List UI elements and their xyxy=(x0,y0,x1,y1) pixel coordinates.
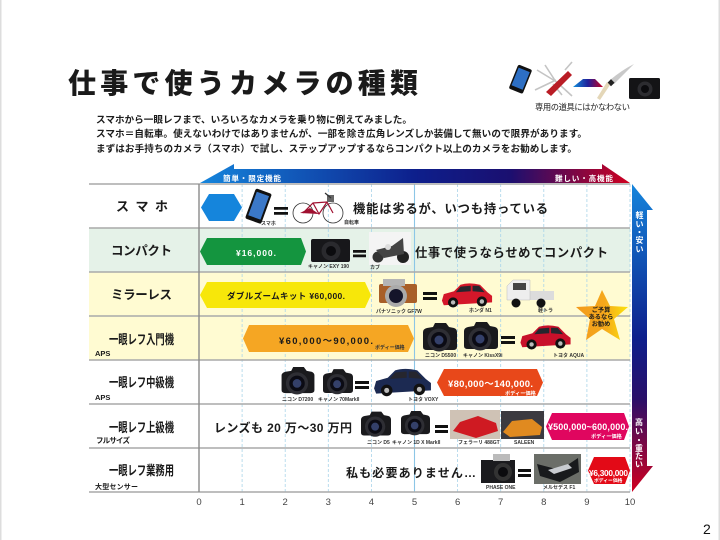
row: mirrorless xyxy=(111,279,554,315)
star callout: recommended: あるなら xyxy=(589,313,613,321)
row: high-end DSLR: ¥500,000~600,000. xyxy=(548,422,628,432)
row: high-end DSLR: SALEEN xyxy=(514,440,535,446)
equals xyxy=(423,292,437,300)
row: mid DSLR: ボディー価格 xyxy=(505,389,537,397)
row: entry DSLR: ボディー価格 xyxy=(375,344,405,351)
price tag: green xyxy=(200,238,306,265)
row: mid DSLR: キャノン 70MarkII xyxy=(318,397,360,403)
top arrow: difficulty and functions: 簡単・限定機能 xyxy=(223,173,281,183)
comment: 仕事で使うならせめてコンパクト xyxy=(415,245,608,260)
row: mid DSLR: ニコン D7200 xyxy=(282,397,313,403)
row: entry DSLR: キャノン KissX9i xyxy=(463,353,503,359)
row: mid DSLR: ¥80,000～140,000. xyxy=(448,379,533,390)
icon: kei truck xyxy=(507,280,554,308)
row: professional DSLR: ボディー価格 xyxy=(594,477,623,484)
icon: bicycle xyxy=(293,193,343,223)
icon: red sports car photo xyxy=(450,410,500,439)
right arrow: weight and price: 高 xyxy=(635,417,643,427)
x axis numbers: 8 xyxy=(541,497,546,508)
comment: 私も必要ありません… xyxy=(346,465,476,480)
row: mid DSLR: APS xyxy=(95,393,110,402)
x axis numbers: 10 xyxy=(625,497,635,508)
comment: 機能は劣るが、いつも持っている xyxy=(353,201,548,216)
x axis numbers xyxy=(196,497,635,508)
icon: orange sports car photo xyxy=(501,411,544,439)
row: high-end DSLR: ニコン D5 xyxy=(367,440,390,446)
row: professional DSLR: ¥6,300,000 xyxy=(589,468,628,478)
intro text: まずはお手持ちのカメラ（スマホ）で試し、ステップアップするならコンパクト以上のカメラをお勧めします。 xyxy=(96,143,577,155)
row: compact: ¥16,000. xyxy=(236,248,276,258)
row: high-end DSLR xyxy=(96,410,629,446)
row: professional DSLR: 大型センサー xyxy=(95,482,138,491)
icon: gradient double arrow xyxy=(573,79,603,87)
icon: medium-format camera xyxy=(481,454,515,483)
equals xyxy=(501,336,515,344)
right arrow: weight and price: 軽 xyxy=(636,210,644,220)
icon: red hatchback xyxy=(520,325,571,350)
x axis numbers: 1 xyxy=(239,497,245,508)
right arrow: weight and price: ・ xyxy=(636,228,644,237)
right arrow: weight and price xyxy=(632,184,653,492)
equals xyxy=(353,250,366,257)
equals xyxy=(355,381,369,389)
row: professional DSLR: メルセデス F1 xyxy=(543,484,575,491)
row label: 一眼レフ業務用 xyxy=(109,463,174,478)
row: entry DSLR: トヨタ AQUA xyxy=(553,352,585,359)
row: entry DSLR: ニコン D5500 xyxy=(425,353,456,359)
equals xyxy=(274,207,288,215)
x axis numbers: 5 xyxy=(412,497,417,508)
right arrow: weight and price: い xyxy=(635,427,643,436)
icon: DSLR xyxy=(361,412,391,437)
x axis numbers: 2 xyxy=(283,497,288,508)
price tag: blank blue xyxy=(201,194,242,221)
page number: 2 xyxy=(703,521,711,537)
icon: moped photo xyxy=(369,232,411,265)
star callout: recommended xyxy=(576,290,628,340)
price tag: red-orange xyxy=(437,369,543,396)
row: high-end DSLR: フェラーリ 488GT xyxy=(458,440,500,446)
icon: compact camera xyxy=(629,78,660,99)
icon: DSLR xyxy=(401,411,430,435)
star callout: recommended: お勧め xyxy=(592,320,610,328)
row: compact: キャノン EXY 190 xyxy=(308,264,349,270)
price tag: yellow xyxy=(200,282,371,308)
x axis numbers: 4 xyxy=(369,497,374,508)
comment: レンズも 20 万～30 万円 xyxy=(214,420,352,435)
icon: DSLR xyxy=(323,369,353,394)
row: mid DSLR xyxy=(95,367,543,403)
row: professional DSLR xyxy=(95,454,630,491)
icon: navy minivan xyxy=(374,369,431,396)
price tag: magenta xyxy=(546,413,629,440)
right arrow: weight and price: 安 xyxy=(636,235,644,245)
x axis numbers: 0 xyxy=(196,497,202,508)
intro text: スマホ＝自転車。使えないわけではありませんが、一部を除き広角レンズしか装備して無いので限界があります。 xyxy=(96,128,587,140)
icon: red car xyxy=(442,283,492,308)
row: entry DSLR xyxy=(95,322,585,359)
right arrow: weight and price: い xyxy=(635,460,643,469)
row label: ミラーレス xyxy=(111,288,172,302)
right arrow: weight and price: ・ xyxy=(635,436,643,445)
equals xyxy=(518,469,531,477)
row: smartphone xyxy=(116,188,548,227)
icon: kitchen knife xyxy=(597,64,634,100)
icon: smartphone xyxy=(245,188,272,224)
price tag: red xyxy=(588,457,630,484)
x axis numbers: 7 xyxy=(498,497,503,508)
right arrow: weight and price: た xyxy=(635,451,643,461)
title: 仕事で使うカメラの種類 xyxy=(68,68,418,99)
illustration: general tools versus dedicated tools xyxy=(509,62,660,112)
row backgrounds xyxy=(89,228,630,360)
icon: DSLR xyxy=(464,322,498,350)
x axis numbers: 6 xyxy=(455,497,460,508)
top arrow: difficulty and functions: 難しい・高機能 xyxy=(555,173,613,183)
icon: DSLR xyxy=(282,367,314,395)
row: compact xyxy=(111,232,608,271)
row: high-end DSLR: キャノン 1D X MarkII xyxy=(392,440,441,446)
right arrow: weight and price: い xyxy=(636,220,644,229)
row label: コンパクト xyxy=(111,244,172,258)
icon: smartphone xyxy=(509,64,532,94)
icon: mirrorless camera xyxy=(379,279,417,307)
intro text: スマホから一眼レフまで、いろいろなカメラを乗り物に例えてみました。 xyxy=(96,114,412,126)
row: smartphone: スマホ xyxy=(261,220,276,227)
intro text xyxy=(96,114,587,155)
row: mirrorless: パナソニック GF7W xyxy=(376,308,422,315)
row: mirrorless: ダブルズームキット ¥60,000. xyxy=(227,291,345,301)
icon: DSLR xyxy=(423,323,457,352)
row label: 一眼レフ上級機 xyxy=(109,420,174,435)
top arrow: difficulty and functions xyxy=(200,164,630,183)
row: mid DSLR: トヨタ VOXY xyxy=(408,396,439,403)
star callout: recommended: ご予算 xyxy=(592,306,610,314)
equals xyxy=(435,425,448,433)
row label: ス マ ホ xyxy=(116,199,168,214)
row: professional DSLR: PHASE ONE xyxy=(486,485,516,491)
row: entry DSLR: APS xyxy=(95,349,110,358)
icon: multi-tool knife xyxy=(535,62,572,96)
icon: compact camera xyxy=(311,239,350,262)
row: high-end DSLR: フルサイズ xyxy=(96,435,130,445)
price tag: orange xyxy=(243,325,414,352)
row label: 一眼レフ中級機 xyxy=(109,375,174,390)
row label: 一眼レフ入門機 xyxy=(109,332,174,347)
caption: 専用の道具にはかなわない xyxy=(535,102,630,112)
row: mirrorless: ホンダ N1 xyxy=(469,307,492,314)
x axis numbers: 9 xyxy=(584,497,590,508)
right arrow: weight and price: 重 xyxy=(635,443,643,453)
row: compact: カブ xyxy=(370,264,380,271)
row: high-end DSLR: ボディー価格 xyxy=(591,432,623,440)
x axis numbers: 3 xyxy=(326,497,331,508)
row: mirrorless: 軽トラ xyxy=(538,307,553,314)
right arrow: weight and price: い xyxy=(636,245,644,254)
grid lines xyxy=(242,184,630,492)
row: smartphone: 自転車 xyxy=(344,219,359,226)
icon: F1 car photo xyxy=(534,454,581,484)
row: entry DSLR: ¥60,000～90,000. xyxy=(279,336,373,347)
